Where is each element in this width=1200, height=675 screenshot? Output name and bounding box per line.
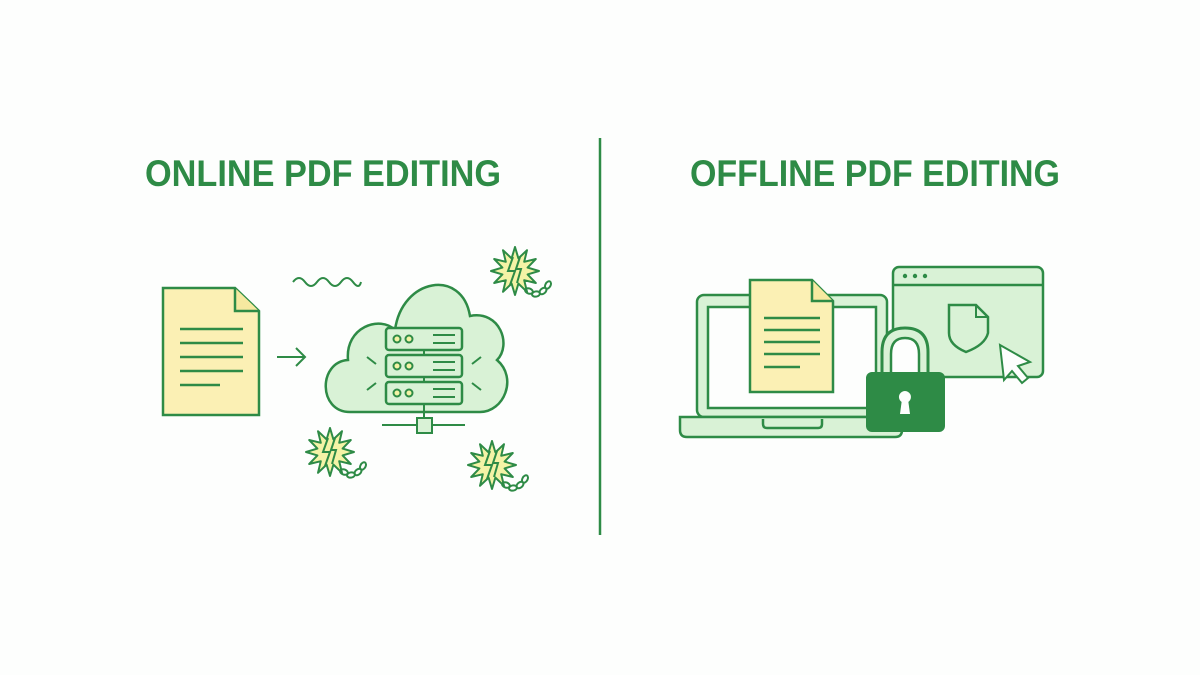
icon: document offline	[750, 280, 833, 392]
icon: browser window	[893, 267, 1043, 383]
icon: burst bottom right	[468, 441, 529, 491]
title: offline: OFFLINE PDF EDITING	[690, 153, 1060, 194]
icon: burst bottom left	[306, 428, 367, 478]
arrow	[277, 348, 305, 366]
icon: cloud server	[326, 285, 507, 433]
icon: laptop	[680, 295, 902, 437]
wave	[293, 278, 361, 286]
icon: burst top right	[491, 247, 552, 297]
divider	[599, 138, 601, 535]
icon: document online	[163, 288, 259, 415]
title: online: ONLINE PDF EDITING	[145, 153, 501, 194]
icon: padlock	[866, 328, 945, 432]
